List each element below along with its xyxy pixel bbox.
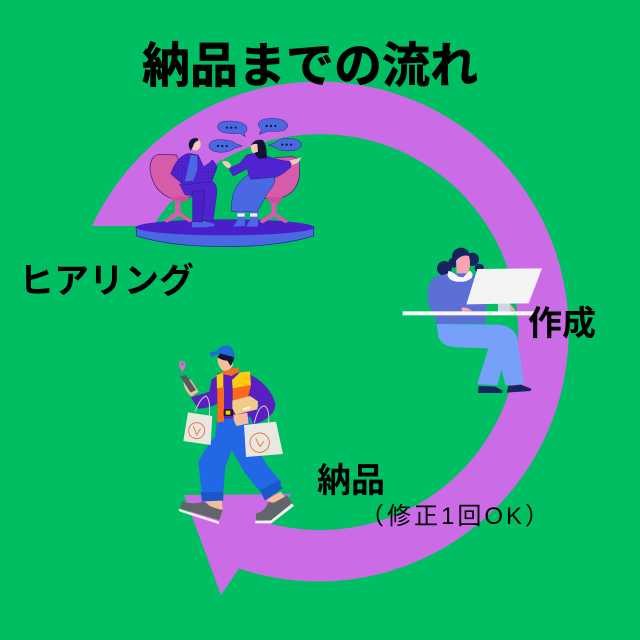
woman [222, 140, 302, 227]
left shopping bag [183, 396, 212, 445]
desk [403, 311, 536, 315]
right shoe [256, 495, 293, 521]
torso [217, 373, 250, 419]
illustration: delivery person [179, 345, 294, 524]
speech bubbles [209, 118, 302, 152]
label: creation: 作成 [528, 305, 596, 343]
location pin [179, 361, 186, 372]
monitor stand [498, 300, 510, 312]
phone [180, 375, 196, 393]
parcel [232, 396, 258, 415]
scarf [222, 367, 239, 376]
shoes [478, 386, 503, 393]
label: delivery: 納品 [317, 462, 385, 500]
trouser cuffs [201, 481, 283, 501]
right arm [247, 373, 275, 425]
hair [437, 248, 484, 276]
circular arrow [92, 82, 569, 595]
neck and face [456, 256, 470, 277]
hand [183, 379, 199, 397]
right shopping bag [244, 406, 283, 457]
label: hearing: ヒアリング [19, 262, 194, 301]
left chair [150, 154, 194, 223]
bubble dots [217, 125, 292, 147]
left arm [191, 375, 218, 409]
illustration: designer at computer [403, 248, 542, 393]
belt [224, 409, 233, 416]
trousers [198, 417, 282, 497]
man [171, 138, 217, 227]
cap [209, 345, 235, 357]
illustration: hearing meeting [136, 118, 314, 247]
trousers [437, 324, 524, 385]
hand holding parcel [233, 413, 249, 426]
label: one revision OK: （修正1回OK） [360, 503, 552, 530]
right chair [259, 157, 299, 223]
title: 納品までの流れ [142, 40, 478, 93]
head [217, 356, 233, 371]
platform [136, 219, 314, 247]
sweater [427, 273, 487, 324]
monitor [466, 268, 542, 304]
collar [447, 271, 473, 282]
left shoe [180, 501, 223, 520]
hand [461, 305, 516, 311]
vest [217, 387, 224, 423]
feet [206, 492, 287, 510]
